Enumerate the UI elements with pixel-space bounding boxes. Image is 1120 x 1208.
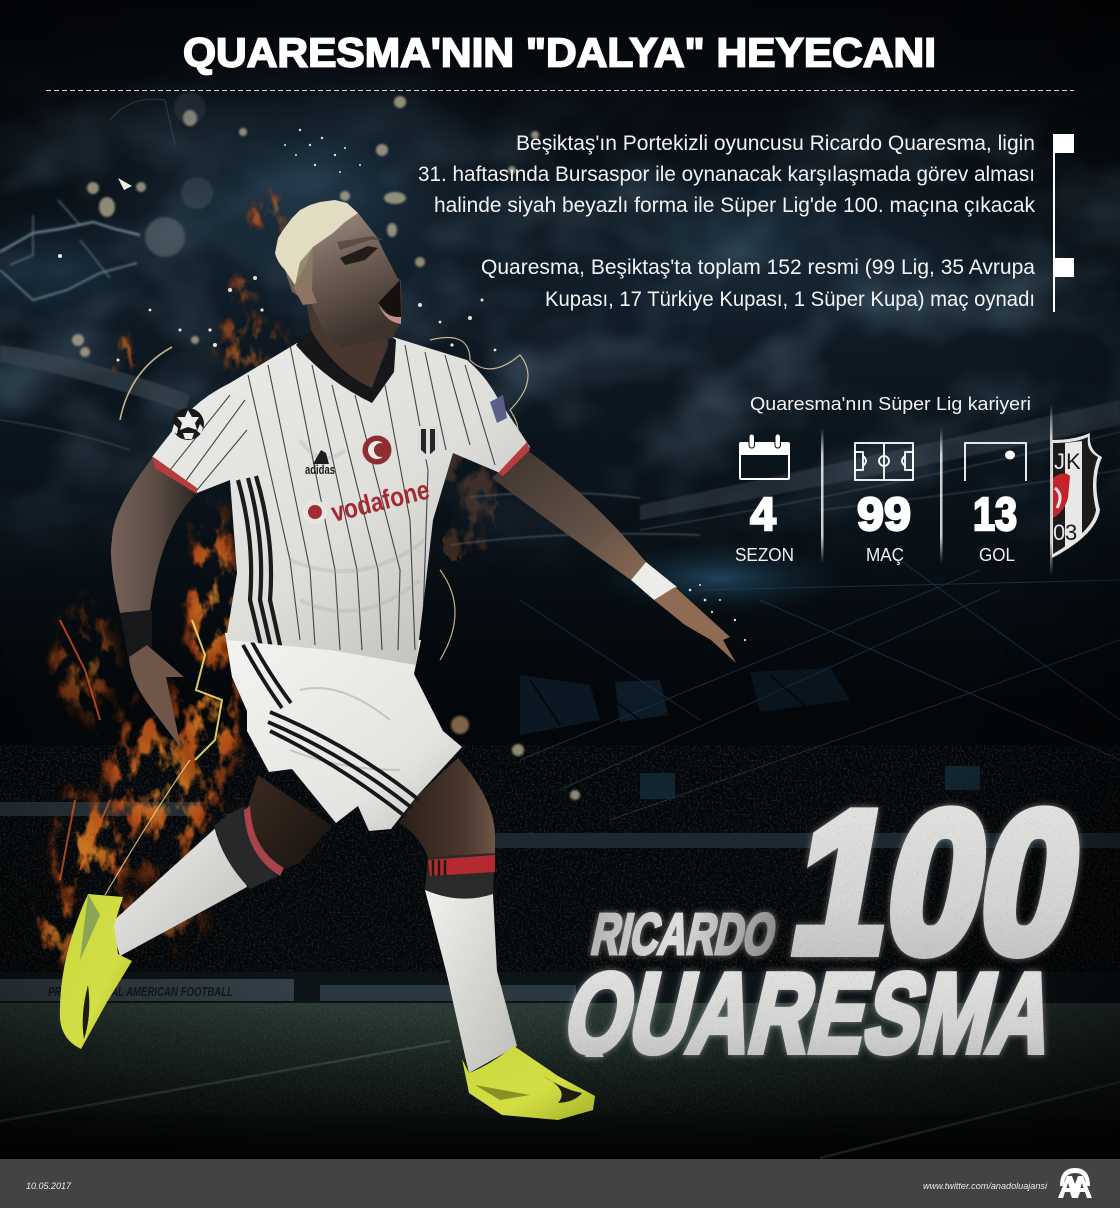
jersey collar: [296, 330, 396, 403]
crowd stands: [0, 745, 1120, 980]
stat: seasons: SEZON: [735, 545, 794, 565]
footer bar: [0, 1159, 1120, 1208]
stadium roof structures: [0, 345, 1120, 545]
icon: Besiktas crest: K: [1066, 449, 1081, 474]
left arm and hand: [111, 457, 197, 748]
icon: goal and ball: [965, 443, 1026, 481]
footer bar: www.twitter.com/anadoluajansi: [923, 1181, 1048, 1191]
blue light glow and flare: [590, 542, 850, 614]
jersey: [152, 330, 530, 665]
big title: Ricardo 100 Quaresma: RICARDO: [586, 903, 782, 967]
text block: match summary: Kupası, 17 Türkiye Kupası, 1 Süper Kupa) maç oynadı: [545, 288, 1035, 311]
scoreboard panels: [640, 766, 980, 799]
stat: seasons: 4: [750, 488, 776, 540]
stat: goals: GOL: [979, 545, 1015, 565]
neck: [306, 300, 388, 388]
pitch-side boards: [0, 972, 1120, 1004]
stat: goals: [965, 443, 1026, 565]
icon: Anadolu Agency logo: [1058, 1168, 1092, 1198]
icon: Besiktas crest: J: [1054, 449, 1065, 474]
jersey: vodafone: [328, 475, 432, 528]
eye and brow: [340, 246, 378, 265]
shorts: [225, 633, 462, 831]
crest and badges on jersey: [362, 436, 392, 464]
roof truss: [520, 668, 850, 735]
icon: football pitch: [855, 443, 913, 480]
pitch-side boards: PROFESSIONAL AMERICAN FOOTBALL: [48, 984, 233, 999]
stat: goals: 13: [973, 488, 1017, 540]
pitch: [0, 1003, 1120, 1159]
bullet timeline: [1053, 134, 1074, 312]
icon: Besiktas crest: 3: [1065, 520, 1077, 545]
diagonal stadium cables: [520, 560, 1120, 820]
hair: [275, 200, 358, 285]
text block: match summary: [418, 132, 1035, 311]
icon: Besiktas crest: [1052, 433, 1102, 558]
text block: match summary: 31. haftasında Bursaspor ile oynanacak karşılaşmada görev alması: [418, 163, 1035, 186]
text block: match summary: halinde siyah beyazlı forma ile Süper Lig'de 100. maçına çıkacak: [434, 194, 1035, 217]
text block: match summary: Quaresma, Beşiktaş'ta toplam 152 resmi (99 Lig, 35 Avrupa: [481, 256, 1035, 279]
jersey: adidas: [305, 462, 335, 477]
stats dividers: [821, 404, 1052, 576]
fire and sparks behind player: [34, 129, 746, 975]
ear: [293, 284, 317, 305]
stat: matches: MAÇ: [866, 545, 904, 565]
stat: matches: [855, 443, 913, 565]
icon: calendar: [739, 434, 790, 480]
head: [275, 200, 402, 347]
stats heading: Quaresma'nın Süper Lig kariyeri: [750, 393, 1031, 414]
right arm and hand: [492, 448, 736, 663]
bokeh particles: [58, 92, 580, 800]
player: Ricardo Quaresma: [60, 200, 736, 1120]
text block: match summary: Beşiktaş'ın Portekizli oyuncusu Ricardo Quaresma, ligin: [516, 132, 1035, 155]
big title: Ricardo 100 Quaresma: [564, 801, 1084, 1062]
footer bar: 10.05.2017: [26, 1181, 72, 1191]
back leg: [60, 775, 332, 1049]
lightning strokes: [0, 200, 140, 300]
stat: matches: 99: [857, 488, 911, 540]
title: QUARESMA'NIN "DALYA" HEYECANI: [183, 30, 936, 76]
stat: seasons: [735, 434, 794, 565]
sleeve cuffs: [152, 456, 197, 494]
icon: Besiktas crest: 0: [1053, 520, 1065, 545]
front leg: [399, 758, 595, 1120]
open mouth: [378, 280, 401, 318]
